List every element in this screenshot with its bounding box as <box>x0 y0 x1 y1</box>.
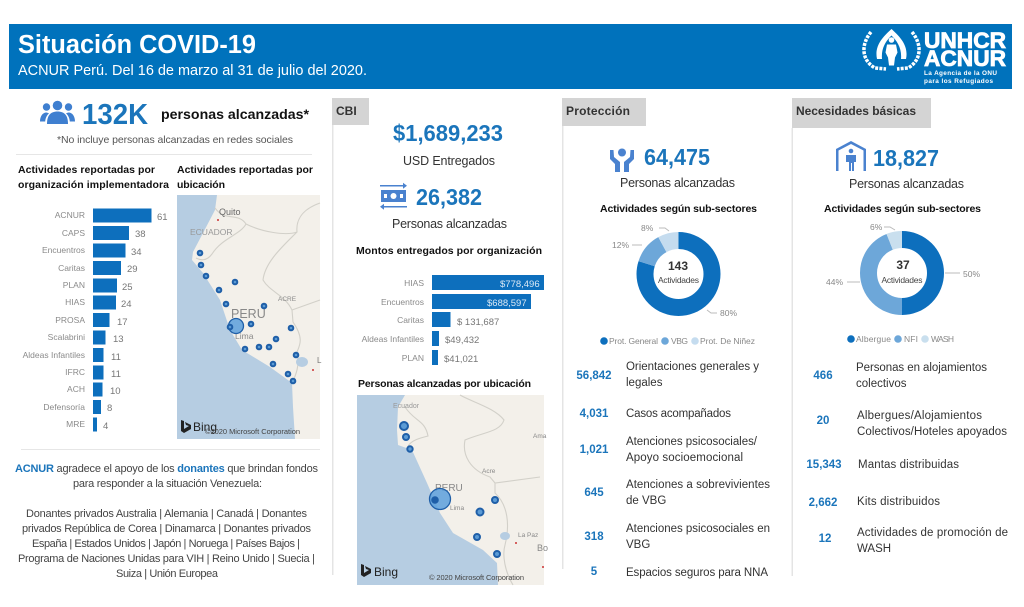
stat label: USD Entregados <box>403 154 495 168</box>
panel: Protección <box>562 98 770 579</box>
donut chart: necesidades <box>826 222 980 306</box>
stat label: personas alcanzadas* <box>161 107 310 122</box>
heading: Actividades reportadas por <box>18 164 155 176</box>
bar chart: organizaciones: 13 <box>113 334 124 345</box>
map: Perú personas: Ama <box>533 433 547 440</box>
bar chart: organizaciones: 61 <box>157 212 168 223</box>
tab: Protección: Protección <box>566 104 630 118</box>
bar chart: organizaciones: 10 <box>110 386 121 397</box>
lista de donantes: Programa de Naciones Unidas para VIH | Reino Unido | Suecia | <box>18 553 315 565</box>
subtitle: ACNUR Perú. Del 16 de marzo al 31 de julio del 2020. <box>18 63 367 79</box>
donut chart: protección: 12% <box>612 240 629 250</box>
panel: Necesidades básicas <box>792 98 1008 576</box>
list: protección: legales <box>626 377 663 389</box>
map: Perú actividades: ECUADOR <box>190 227 233 237</box>
lista de donantes: Donantes privados Australia | Alemania | Canadá | Donantes <box>26 508 308 520</box>
legend: necesidades: WASH <box>931 334 954 344</box>
list: necesidades: 20 <box>817 415 829 427</box>
panel: actividades por ubicación <box>177 164 322 439</box>
stat label: Personas alcanzadas <box>620 176 735 190</box>
bar chart: montos: HIAS <box>404 278 424 288</box>
tab: Necesidades básicas <box>792 98 931 128</box>
panel: resumen general <box>16 99 312 155</box>
map: Perú actividades: Lima <box>235 331 254 341</box>
tab: Protección <box>562 98 646 126</box>
stat: 26,382: 26,382 <box>416 184 482 210</box>
agradecimiento: ACNUR agradece el apoyo de los donantes que brindan fondos <box>15 463 318 475</box>
bar chart: organizaciones: 25 <box>122 282 133 293</box>
bar chart: organizaciones: 24 <box>121 299 132 310</box>
list: necesidades: colectivos <box>856 378 907 390</box>
heading <box>18 164 169 191</box>
donut chart: necesidades: 50% <box>963 269 980 279</box>
heading: sub-sectores: Actividades según sub-sectores <box>824 203 981 215</box>
map: Perú actividades: L <box>317 356 322 365</box>
donut chart: protección: Actividades <box>658 275 699 285</box>
map: Perú personas: La Paz <box>518 532 538 539</box>
bar chart: organizaciones: 11 <box>111 369 121 380</box>
icon: people <box>40 101 75 124</box>
map: Perú personas: Bo <box>537 543 548 553</box>
map: Perú personas: Bing <box>374 565 398 579</box>
bar chart: organizaciones: HIAS <box>65 297 85 307</box>
bar chart: organizaciones: ACH <box>67 384 85 394</box>
legend: necesidades <box>847 334 954 344</box>
lista de donantes: Suiza | Unión Europea <box>116 568 219 580</box>
list: necesidades: 15,343 <box>806 459 842 471</box>
panel: CBI <box>332 98 548 585</box>
map: Perú personas: Ecuador <box>393 403 420 410</box>
panel: actividades por organización <box>18 164 169 432</box>
logo: UNHCR ACNUR: ACNUR <box>924 46 1006 71</box>
list: protección: Atenciones psicosociales/ <box>626 436 758 448</box>
list: necesidades <box>806 362 1008 555</box>
legend: protección <box>600 336 755 346</box>
bar chart: organizaciones: 4 <box>103 421 108 432</box>
bar chart: organizaciones: 34 <box>131 247 142 258</box>
heading: personas por ubicación: Personas alcanzadas por ubicación <box>358 378 531 390</box>
heading: sub-sectores: Actividades según sub-sectores <box>600 203 757 215</box>
list: necesidades: Albergues/Alojamientos <box>857 410 982 422</box>
heading <box>177 164 313 191</box>
legend: protección: VBG <box>671 336 688 346</box>
list: protección: Atenciones psicosociales en <box>626 523 770 535</box>
list: protección: Atenciones a sobrevivientes <box>626 479 770 491</box>
logo text: UNHCR <box>924 28 1006 53</box>
donut chart: protección <box>612 223 737 318</box>
heading: organización implementadora <box>18 179 169 191</box>
stat: 132K: 132K <box>82 99 148 131</box>
list: necesidades: 12 <box>819 533 831 545</box>
legend: necesidades: NFI <box>904 334 918 344</box>
list: protección: 318 <box>584 531 604 543</box>
heading: montos: Montos entregados por organización <box>356 245 542 257</box>
title: Situación COVID-19 <box>18 31 256 59</box>
bar chart: organizaciones: Caritas <box>58 263 85 273</box>
heading: Actividades reportadas por <box>177 164 313 176</box>
list: protección: 56,842 <box>576 370 612 382</box>
tab: Necesidades básicas: Necesidades básicas <box>796 104 916 118</box>
bar chart: organizaciones: MRE <box>66 419 85 429</box>
bar chart: montos: Caritas <box>397 315 424 325</box>
tab: CBI <box>332 98 369 125</box>
map: Perú actividades <box>177 195 322 439</box>
list: protección: de VBG <box>626 495 666 507</box>
donut chart: necesidades: 37 <box>896 258 910 272</box>
tab: CBI: CBI <box>336 104 357 118</box>
legend: protección: Prot. General <box>609 336 658 346</box>
bar chart: montos: $49,432 <box>445 335 479 346</box>
legend: protección: Prot. De Niñez <box>700 336 755 346</box>
list: necesidades: 2,662 <box>809 497 837 509</box>
bar chart: organizaciones: Aldeas Infantiles <box>23 350 85 360</box>
donut chart: protección: 80% <box>720 308 737 318</box>
donut chart: protección: 8% <box>641 223 654 233</box>
list: necesidades: Colectivos/Hoteles apoyados <box>857 426 1007 438</box>
footnote: *No incluye personas alcanzadas en redes sociales <box>57 134 293 146</box>
list: necesidades: Personas en alojamientos <box>856 362 987 374</box>
bar chart: organizaciones: Scalabrini <box>48 332 85 342</box>
bar chart: organizaciones: 8 <box>107 403 112 414</box>
icon: cash transfer <box>380 183 407 210</box>
lista de donantes <box>18 508 315 580</box>
map: Perú personas <box>357 395 548 585</box>
bar chart: organizaciones: Defensoría <box>43 402 85 412</box>
bar chart: organizaciones: 29 <box>127 264 138 275</box>
bar chart: montos: PLAN <box>402 353 424 363</box>
map: Perú actividades: ACRE <box>278 296 297 303</box>
bar chart: montos: $41,021 <box>444 354 478 365</box>
logo: UNHCR ACNUR: La Agencia de la ONU <box>924 70 997 77</box>
list: protección: 645 <box>584 487 604 499</box>
heading: ubicación <box>177 179 225 191</box>
icon: UNHCR emblem <box>864 29 919 69</box>
list: protección: 1,021 <box>580 444 609 456</box>
list: protección: Espacios seguros para NNA <box>626 567 768 579</box>
donut chart: necesidades: 6% <box>870 222 883 232</box>
header banner <box>9 24 1012 89</box>
list: necesidades: 466 <box>813 370 833 382</box>
lista de donantes: privados República de Corea | Dinamarca | Donantes privados <box>22 523 312 535</box>
list: protección: Apoyo socioemocional <box>626 452 743 464</box>
list: protección: 4,031 <box>580 408 609 420</box>
map: Perú personas: PERU <box>435 483 463 494</box>
legend: necesidades: Albergue <box>856 334 891 344</box>
bar chart: organizaciones: 17 <box>117 317 128 328</box>
map: Perú personas: © 2020 Microsoft Corporation <box>429 573 524 582</box>
bar chart: organizaciones: IFRC <box>65 367 85 377</box>
list: protección <box>576 361 770 579</box>
donut chart: protección: 143 <box>668 259 688 273</box>
stat: 18,827: 18,827 <box>873 145 939 171</box>
bar chart: organizaciones: PROSA <box>55 315 85 325</box>
lista de donantes: España | Estados Unidos | Japón | Noruega | Países Bajos | <box>32 538 300 550</box>
bar chart: organizaciones: CAPS <box>62 228 85 238</box>
list: protección: Casos acompañados <box>626 408 731 420</box>
bar chart: organizaciones: Encuentros <box>42 245 85 255</box>
donut chart: necesidades: 44% <box>826 277 843 287</box>
bar chart: organizaciones: 11 <box>111 352 121 363</box>
icon: shelter <box>836 141 866 171</box>
bar chart: montos <box>362 275 544 365</box>
list: protección: VBG <box>626 539 650 551</box>
map: Perú actividades: PERU <box>231 307 266 321</box>
list: protección: 5 <box>591 566 598 578</box>
map: Perú personas: Acre <box>482 468 496 475</box>
list: necesidades: Kits distribuidos <box>857 496 940 508</box>
donut chart: necesidades: Actividades <box>882 275 922 285</box>
bar chart: montos: $778,496 <box>500 279 540 290</box>
bar chart: montos: $ 131,687 <box>457 317 499 328</box>
stat label: Personas alcanzadas <box>849 177 964 191</box>
list: necesidades: Actividades de promoción de <box>857 527 1008 539</box>
bar chart: organizaciones: PLAN <box>63 280 85 290</box>
stat label: Personas alcanzadas <box>392 217 507 231</box>
panel: donantes: para responder a la situación Venezuela: <box>73 478 262 490</box>
map: Perú personas: Lima <box>450 505 464 512</box>
bar chart: montos: Aldeas Infantiles <box>362 334 424 344</box>
list: protección: Orientaciones generales y <box>626 361 759 373</box>
logo: UNHCR ACNUR <box>864 28 1006 85</box>
bar chart: montos: $688,597 <box>487 298 527 309</box>
bar chart: montos: Encuentros <box>381 297 424 307</box>
map: Perú actividades: ©2020 Microsoft Corporation <box>205 427 300 436</box>
icon: protected person <box>610 148 634 172</box>
bar chart: organizaciones: ACNUR <box>55 210 85 220</box>
list: necesidades: WASH <box>857 543 891 555</box>
map: Perú actividades: Bing <box>193 420 217 434</box>
stat: 64,475: 64,475 <box>644 144 710 170</box>
bar chart: organizaciones <box>23 208 168 432</box>
list: necesidades: Mantas distribuidas <box>858 459 959 471</box>
panel: donantes <box>15 449 320 580</box>
stat: monto USD: $1,689,233 <box>393 120 503 146</box>
bar chart: organizaciones: 38 <box>135 229 146 240</box>
map: Perú actividades: Quito <box>219 207 241 217</box>
logo: UNHCR ACNUR: para los Refugiados <box>924 78 993 85</box>
